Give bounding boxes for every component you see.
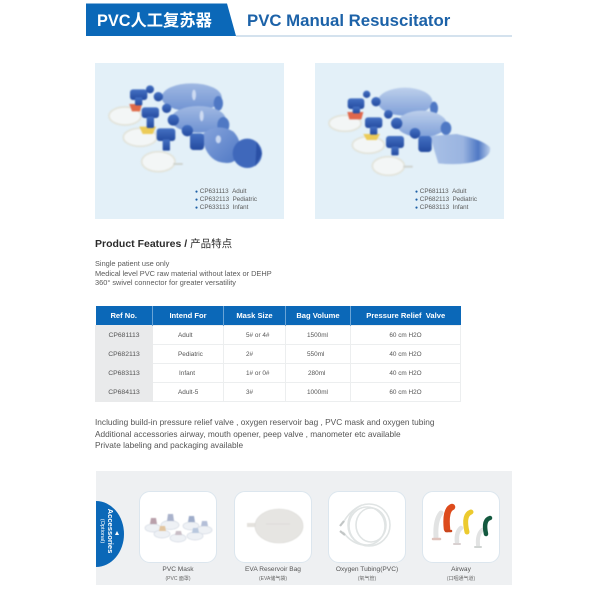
card: EVA reservoir bag: [234, 491, 312, 563]
specification table: Mask Size: [236, 311, 273, 320]
specification table: Pressure Relief Valve: [366, 311, 445, 320]
text block: feature list: Medical level PVC raw material without latex or DEHP: [95, 268, 272, 278]
panel: accessories: [96, 471, 512, 585]
specification table: 5# or 4#: [246, 332, 269, 338]
caption: EVA reservoir bag: EVA Reservoir Bag: [245, 566, 301, 573]
model list: ● CP682113 Pediatric: [415, 196, 477, 203]
header tab and rule: [86, 4, 512, 36]
caption: oxygen tubing: (氧气管): [358, 576, 376, 582]
specification table: Adult: [178, 332, 193, 338]
panel: product photo CP68 series: [315, 63, 504, 219]
specification table: CP681113: [108, 332, 140, 338]
specification table: 2#: [246, 350, 253, 358]
heading: product features: Product Features / 产品特点: [95, 238, 232, 250]
caption: airway: (口咽通气道): [447, 576, 475, 582]
icon: coiled tubing: [339, 503, 391, 547]
caption: PVC mask: PVC Mask: [162, 566, 194, 573]
caption: oxygen tubing: [336, 566, 398, 582]
model list: ● CP683113 Infant: [415, 204, 468, 211]
caption: airway: [447, 566, 475, 582]
tab label: [100, 508, 115, 553]
accessories tab: [96, 501, 124, 567]
tab arrow: [115, 531, 119, 535]
specification table: 1# or 0#: [246, 370, 269, 376]
text block: inclusions: [95, 417, 434, 450]
specification table: Pediatric: [178, 350, 203, 358]
specification table: 60 cm H2O: [389, 388, 422, 396]
tab label: (Optional): [100, 519, 106, 543]
specification table: 40 cm H2O: [389, 350, 422, 358]
model list: [195, 188, 257, 211]
specification table: Intend For: [169, 311, 207, 320]
model list: ● CP631113 Adult: [195, 188, 246, 195]
icon: group of masks: [144, 514, 212, 543]
specification table: 40 cm H2O: [389, 370, 422, 376]
model list: ● CP681113 Adult: [415, 188, 466, 195]
text block: feature list: [95, 259, 272, 287]
text block: inclusions: Additional accessories airway, mouth opener, peep valve , manometer etc available: [95, 428, 401, 438]
specification table: CP683113: [108, 370, 140, 376]
illustration: three cylindrical resuscitators: [328, 87, 491, 176]
specification table: Infant: [179, 370, 195, 376]
caption: airway: Airway: [451, 566, 471, 573]
specification table: 550ml: [307, 350, 324, 358]
text block: inclusions: Including build-in pressure relief valve , oxygen reservoir bag , PVC mask and oxygen tubing: [95, 417, 434, 427]
model list: ● CP632113 Pediatric: [195, 196, 257, 203]
specification table: Adult-5: [178, 388, 198, 396]
card: airway: [422, 491, 500, 563]
specification table: 1000ml: [307, 388, 328, 396]
icon: reservoir bag: [246, 508, 304, 544]
caption: oxygen tubing: Oxygen Tubing(PVC): [336, 566, 398, 573]
icon: three airways: [432, 504, 492, 548]
specification table: 60 cm H2O: [389, 332, 422, 338]
specification table: CP682113: [108, 350, 140, 358]
header banner: [86, 4, 512, 36]
specification table: CP684113: [108, 388, 140, 396]
card: PVC mask: [139, 491, 217, 563]
model list: ● CP633113 Infant: [195, 204, 248, 211]
card: oxygen tubing: [328, 491, 406, 563]
panel: product photo CP63 series: [95, 63, 284, 219]
text block: feature list: Single patient use only: [95, 259, 169, 268]
specification table: 280ml: [308, 370, 325, 376]
specification table: 3#: [246, 388, 253, 396]
text block: inclusions: Private labeling and packaging available: [95, 440, 243, 450]
specification table: Ref No.: [110, 311, 137, 320]
specification table: Bag Volume: [296, 311, 340, 320]
caption: PVC mask: [162, 566, 194, 582]
specification table: 1500ml: [307, 332, 328, 338]
title: English: PVC Manual Resuscitator: [247, 11, 450, 30]
text block: feature list: 360° swivel connector for greater versatility: [95, 278, 236, 287]
illustration: three spherical resuscitators: [108, 82, 263, 173]
tab label: Accessories: [106, 509, 115, 553]
caption: EVA reservoir bag: (EVA储气袋): [259, 576, 287, 582]
title: Chinese: PVC人工复苏器: [97, 12, 212, 30]
caption: PVC mask: (PVC 面罩): [165, 576, 190, 582]
caption: EVA reservoir bag: [245, 566, 301, 582]
specification table: [95, 306, 461, 402]
model list: [415, 188, 477, 211]
